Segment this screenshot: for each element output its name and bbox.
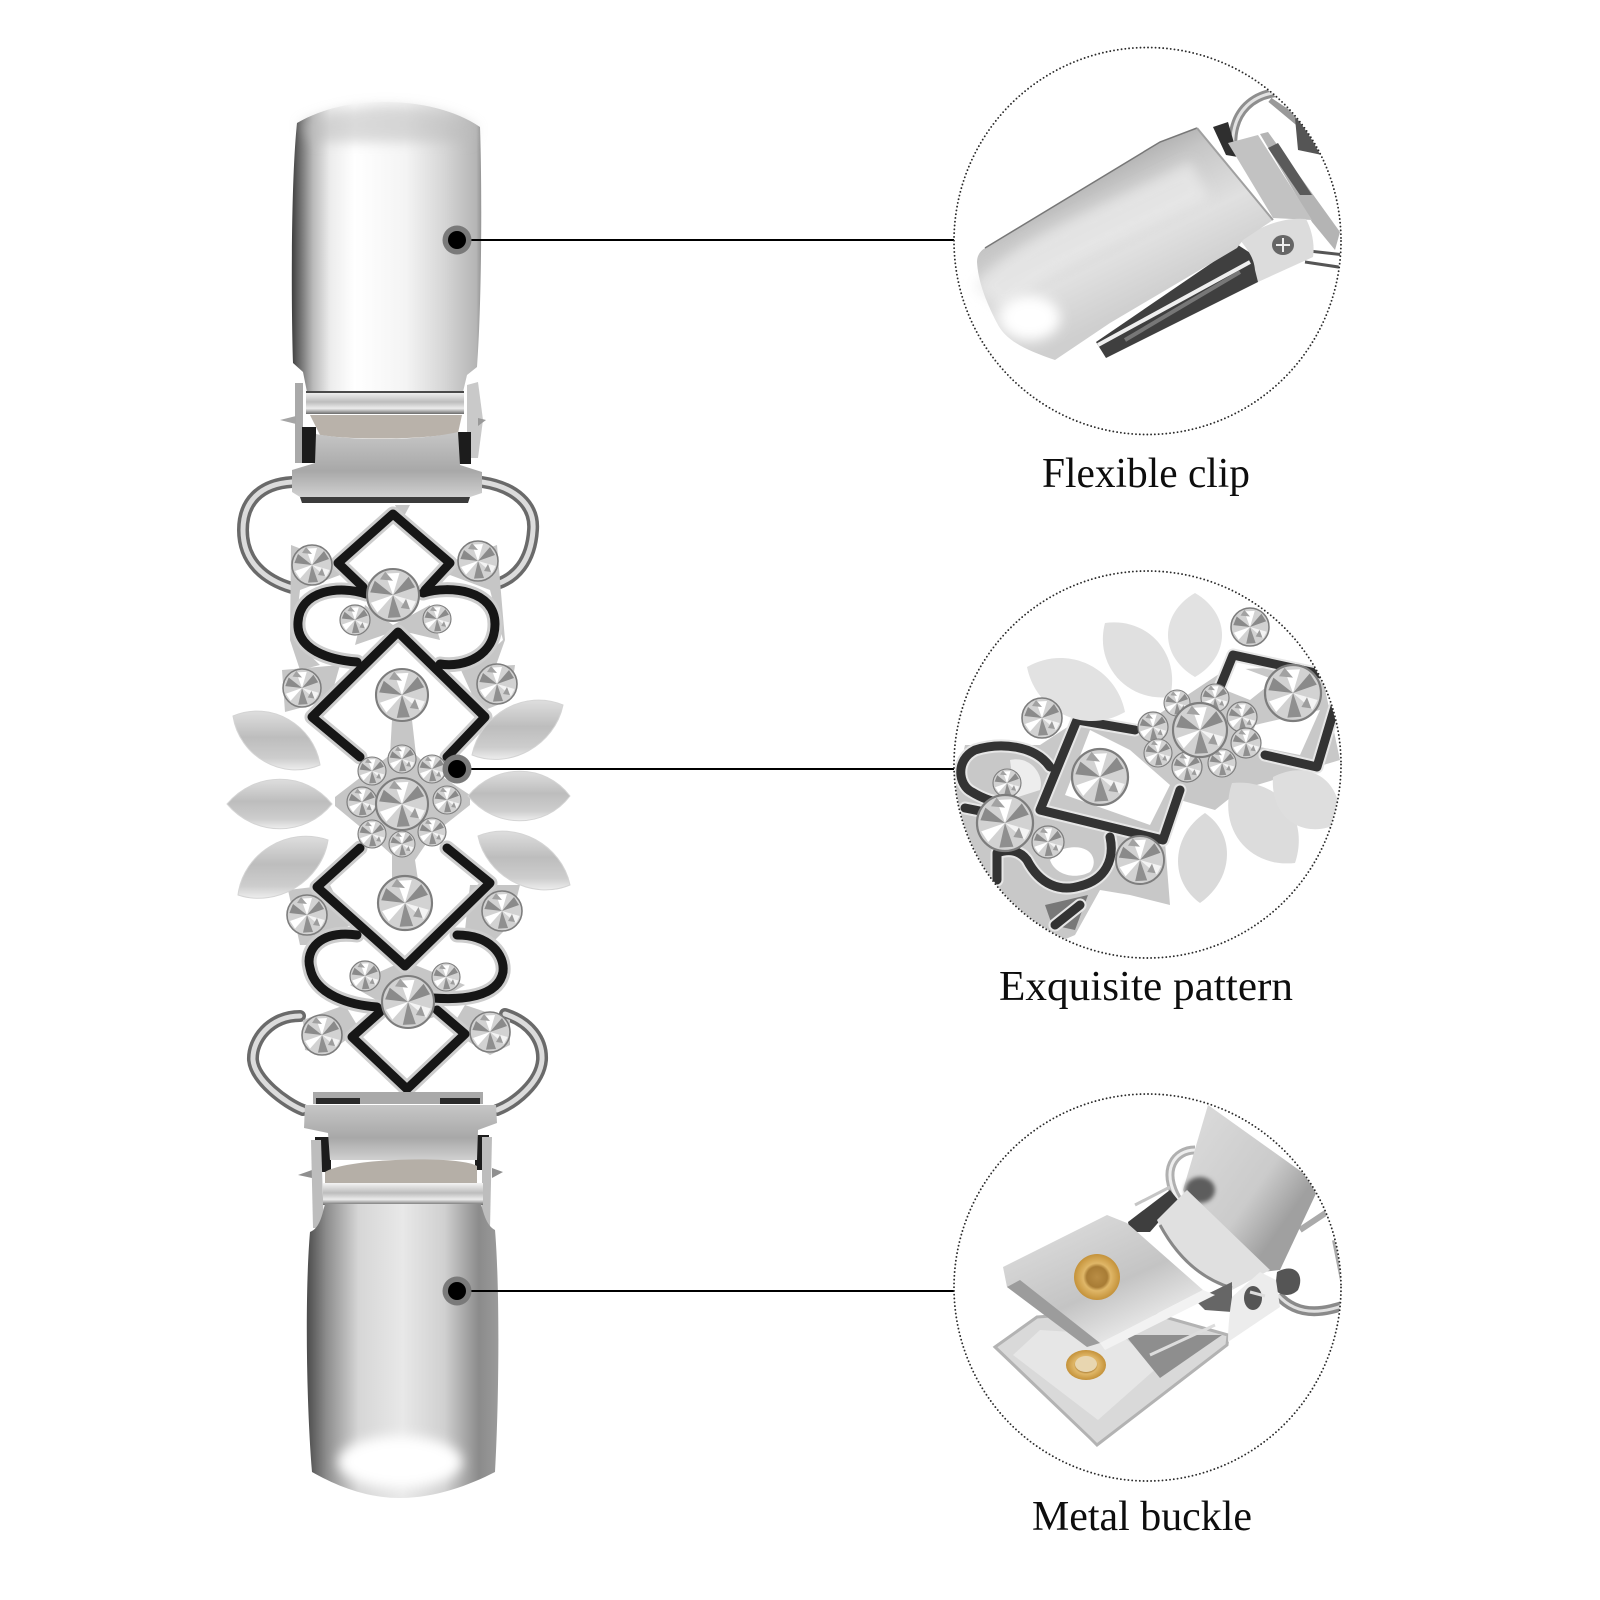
ornament pearls [227, 700, 570, 898]
panel: metal buckle detail [954, 1094, 1345, 1481]
detail image: exquisite pattern [955, 593, 1340, 950]
top clip fold band [306, 392, 464, 414]
product: jewelled sweater clip [227, 102, 570, 1498]
bottom clip lower arch [325, 1159, 477, 1184]
top clip plate [292, 102, 481, 392]
bottom clip side arms and pins [298, 1135, 503, 1228]
detail image: metal buckle [995, 1105, 1345, 1445]
dotted circle [954, 571, 1341, 958]
top clip plate shading [300, 106, 477, 142]
top clip tab [292, 432, 482, 497]
ornament backing silver [282, 505, 520, 1098]
connector: pattern callout [442, 754, 954, 784]
ornament rhinestones [283, 541, 522, 1055]
bottom clip tab [304, 1105, 497, 1160]
panel: flexible clip detail [954, 48, 1345, 434]
caption: flexible clip: Flexible clip [1042, 451, 1250, 497]
bottom clip plate [307, 1204, 498, 1498]
top clip lower arch [310, 415, 462, 439]
bottom clip strip [313, 1092, 483, 1104]
bottom clip fold band [323, 1183, 483, 1205]
bottom clip [298, 1092, 503, 1498]
detail image: flexible clip [977, 92, 1345, 360]
top clip [280, 102, 486, 503]
bottom clip highlight [338, 1436, 462, 1488]
rings: upper and lower D-rings [243, 482, 542, 1110]
top clip side arms and pins [280, 382, 486, 464]
panel: exquisite pattern detail [954, 571, 1341, 958]
caption: exquisite pattern: Exquisite pattern [999, 964, 1293, 1010]
connector: top clip callout [442, 226, 954, 254]
ornament black enamel lines [298, 514, 503, 1089]
connector: buckle callout [442, 1276, 954, 1306]
dotted circle [954, 48, 1341, 434]
dotted circle [954, 1094, 1341, 1481]
caption: metal buckle: Metal buckle [1032, 1494, 1252, 1540]
